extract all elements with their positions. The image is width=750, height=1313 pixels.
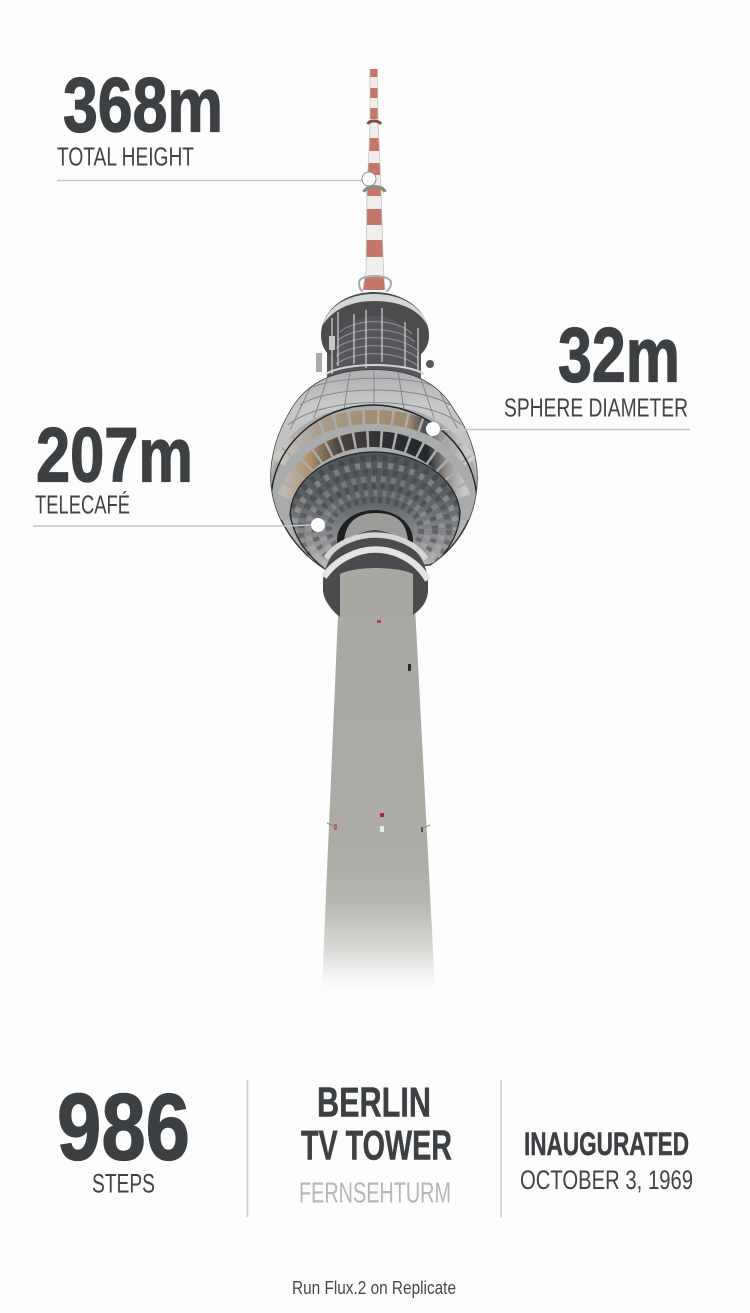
tower shaft bbox=[322, 568, 435, 988]
callout: sphere diameter: 32m bbox=[558, 312, 680, 398]
callout: sphere diameter bbox=[426, 312, 690, 436]
silver upper dome bbox=[271, 370, 477, 476]
callout: sphere diameter: SPHERE DIAMETER bbox=[504, 392, 688, 422]
divider bbox=[500, 1080, 502, 1217]
title: Berlin TV Tower: BERLIN bbox=[317, 1078, 431, 1126]
footer credit: Run Flux.2 on Replicate bbox=[292, 1278, 456, 1298]
stat: inaugurated bbox=[520, 1126, 693, 1195]
neck opening bbox=[337, 510, 413, 570]
callout: total height: TOTAL HEIGHT bbox=[57, 142, 194, 172]
stat: steps: STEPS bbox=[92, 1168, 155, 1198]
callout: total height: 368m bbox=[63, 62, 223, 148]
stat: inaugurated: OCTOBER 3, 1969 bbox=[520, 1165, 693, 1195]
title: Berlin TV Tower: TV TOWER bbox=[301, 1122, 452, 1168]
lower faceted bowl bbox=[290, 452, 460, 570]
tower illustration bbox=[265, 69, 485, 988]
title: Berlin TV Tower: FERNSEHTURM bbox=[299, 1178, 451, 1210]
antenna mast bbox=[359, 69, 391, 291]
callout: telecafe: 207m bbox=[36, 412, 193, 498]
callout: total height bbox=[57, 62, 376, 186]
observation cage and roof disc bbox=[316, 292, 434, 378]
window band bbox=[271, 405, 477, 520]
collar rings bbox=[323, 530, 428, 620]
callout: telecafe: TELECAFÉ bbox=[35, 490, 130, 520]
callout: telecafe bbox=[33, 412, 325, 532]
stat: steps: 986 bbox=[57, 1074, 190, 1180]
title: Berlin TV Tower bbox=[299, 1078, 452, 1210]
divider bbox=[246, 1080, 248, 1217]
faceted sphere bbox=[270, 369, 478, 570]
